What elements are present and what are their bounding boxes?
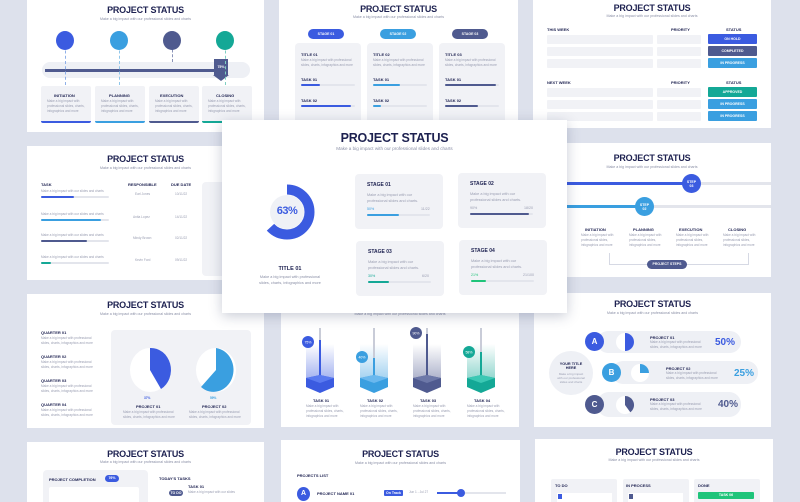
- phase cards: infographics and more: [47, 109, 79, 113]
- step labels: professional slides,: [581, 238, 608, 242]
- stage columns: TASK 01: [301, 77, 317, 82]
- title: PROJECT STATUS: [107, 300, 184, 310]
- step labels: [581, 227, 756, 269]
- step labels: infographics and more: [723, 243, 755, 247]
- step labels: CLOSING: [728, 227, 746, 232]
- table: next week: IN PROGRESS: [720, 114, 745, 118]
- task labels: infographics and more: [306, 414, 338, 418]
- project rows: 50%: [715, 337, 735, 348]
- stage columns: slides, charts, infographics and more: [301, 63, 353, 67]
- quarter list: Make a big impact with professional: [41, 384, 92, 388]
- thermometer bars: 40%: [358, 356, 366, 360]
- step labels: Make a big impact with: [581, 233, 613, 237]
- center title circle: Make a big impact: [559, 372, 583, 376]
- phase cards: professional slides, charts,: [208, 104, 246, 108]
- stage columns: TASK 02: [445, 98, 461, 103]
- table: this week: [547, 27, 757, 68]
- featured slide: project status overview: [222, 120, 567, 313]
- marker 75%: 75%: [217, 65, 224, 69]
- title: PROJECT STATUS: [341, 131, 448, 145]
- marker 75%: [214, 59, 228, 75]
- step tracks: [567, 174, 771, 216]
- phase cards: infographics and more: [155, 109, 187, 113]
- pie panel: [111, 330, 251, 425]
- donut chart 63%: [266, 184, 314, 240]
- subtitle: Make a big impact with our professional slides and charts: [606, 14, 698, 18]
- title 01 text block: [259, 266, 321, 285]
- center title circle: HERE: [566, 366, 576, 370]
- card: stage 01: STAGE 01: [367, 182, 391, 188]
- quarter list: QUARTER 03: [41, 378, 66, 383]
- task labels: TASK 01: [313, 398, 329, 403]
- phase cards: INITIATION: [54, 93, 75, 98]
- project rows: C: [592, 400, 597, 409]
- project rows: slides, charts, infographics and more: [650, 407, 702, 411]
- project list row: PROJECT NAME 01: [317, 491, 354, 496]
- project rows: PROJECT 02: [666, 366, 690, 371]
- project rows: slides, charts, infographics and more: [666, 376, 718, 380]
- stage columns: TITLE 01: [301, 52, 318, 57]
- slide: thermometer tasks: [281, 294, 519, 427]
- card: stage 03: STAGE 03: [368, 249, 392, 255]
- center title circle: with our professional: [557, 376, 585, 380]
- card: stage 03: professional slides and charts.: [368, 266, 419, 270]
- quarter list: Make a big impact with professional: [41, 360, 92, 364]
- task list: Kevin Ford: [135, 258, 150, 262]
- today's tasks: TODAY'S TASKS: [159, 476, 191, 481]
- title 01 text block: TITLE 01: [279, 266, 301, 272]
- project list row: A: [301, 490, 306, 497]
- slide: steps: [533, 143, 771, 277]
- stage columns: Make a big impact with professional: [301, 58, 352, 62]
- kanban columns: IN PROCESS: [626, 483, 651, 488]
- card: stage 04: Make a big impact with our: [471, 259, 516, 263]
- card: stage 04: STAGE 04: [471, 248, 495, 254]
- card: stage 02: [458, 173, 546, 228]
- pie panel: PROJECT 02: [202, 404, 226, 409]
- task list: 02/11/22: [175, 236, 187, 240]
- center title circle: [549, 351, 593, 395]
- phase cards: Make a big impact with: [47, 99, 79, 103]
- slide: stages columns: [279, 0, 518, 132]
- step labels: professional slides,: [629, 238, 656, 242]
- phase cards: infographics and more: [101, 109, 133, 113]
- today's tasks: TO DO: [170, 491, 182, 495]
- card: stage 03: 6/20: [422, 274, 429, 278]
- card: stage 01: [355, 174, 443, 229]
- title: PROJECT STATUS: [362, 449, 439, 459]
- task labels: Make a big impact with: [306, 404, 338, 408]
- task labels: professional slides, charts,: [467, 409, 505, 413]
- step labels: EXECUTION: [679, 227, 702, 232]
- step labels: infographics and more: [629, 243, 661, 247]
- task labels: professional slides, charts,: [360, 409, 398, 413]
- project list row: Jun 1 - Jul 27: [409, 490, 428, 494]
- stage columns: Make a big impact with professional: [445, 58, 496, 62]
- center title circle: YOUR TITLE: [560, 362, 582, 366]
- phase cards: Make a big impact with: [208, 99, 240, 103]
- card: stage 04: [459, 240, 547, 295]
- step tracks: 02: [643, 207, 646, 211]
- task labels: TASK 04: [474, 398, 490, 403]
- stage columns: TITLE 03: [445, 52, 462, 57]
- today's tasks: Make a big impact with our slides: [188, 490, 235, 494]
- project rows: PROJECT 03: [650, 397, 674, 402]
- title 01 text block: Make a big impact with professional: [260, 275, 320, 279]
- card: stage 02: professional slides and charts.: [470, 198, 521, 202]
- step labels: infographics and more: [581, 243, 613, 247]
- step labels: Make a big impact with: [723, 233, 755, 237]
- project rows: Make a big impact with professional: [666, 371, 716, 375]
- step labels: professional slides,: [676, 238, 703, 242]
- task labels: TASK 02: [367, 398, 383, 403]
- card: stage 02: 18/20: [524, 206, 533, 210]
- step labels: professional slides,: [723, 238, 750, 242]
- phase cards: CLOSING: [216, 93, 234, 98]
- stage columns: Make a big impact with professional: [373, 58, 424, 62]
- title: PROJECT STATUS: [614, 3, 690, 13]
- stage columns: [295, 43, 505, 120]
- step labels: Make a big impact with: [676, 233, 708, 237]
- center title circle: slides and charts: [560, 380, 582, 384]
- completion panel: 76%: [108, 476, 116, 480]
- table: this week: COMPLETED: [722, 49, 743, 53]
- quarter list: Make a big impact with professional: [41, 408, 92, 412]
- thermometer bars: 90%: [412, 332, 420, 336]
- pie panel: PROJECT 01: [136, 404, 160, 409]
- kanban columns: DONE: [698, 483, 710, 488]
- stage pills: STAGE 03: [462, 32, 478, 36]
- task labels: [306, 398, 505, 418]
- table: next week: PRIORITY: [671, 80, 690, 85]
- card: stage 03: 30%: [368, 274, 375, 278]
- title: PROJECT STATUS: [614, 153, 690, 163]
- table: this week: THIS WEEK: [547, 27, 569, 32]
- step labels: INITIATION: [585, 227, 606, 232]
- card: stage 04: 21%: [471, 273, 478, 277]
- slide: kanban: [535, 439, 773, 502]
- phase cards: EXECUTION: [160, 93, 183, 98]
- card: stage 03: [356, 241, 444, 296]
- timeline band: [42, 62, 250, 78]
- card: stage 01: 50%: [367, 207, 374, 211]
- table: next week: NEXT WEEK: [547, 80, 571, 85]
- card: stage 01: 11/22: [421, 207, 430, 211]
- quarter list: QUARTER 04: [41, 402, 66, 407]
- kanban columns: TASK 06: [719, 493, 733, 497]
- quarter list: QUARTER 01: [41, 330, 66, 335]
- table: this week: PRIORITY: [671, 27, 690, 32]
- thermometer bars: 58%: [465, 350, 473, 354]
- task list: Make a big impact with our slides and charts: [41, 255, 104, 259]
- subtitle: Make a big impact with our professional slides and charts: [607, 311, 698, 315]
- project rows: Make a big impact with professional: [650, 402, 700, 406]
- task list: Earl Jones: [135, 192, 150, 196]
- step tracks: 03: [690, 184, 693, 188]
- task labels: infographics and more: [360, 414, 392, 418]
- quarter list: slides, charts, infographics and more: [41, 413, 93, 417]
- table: next week: APPROVED: [723, 90, 742, 94]
- project list row: [297, 473, 506, 501]
- subtitle: Make a big impact with our professional slides and charts: [606, 165, 698, 169]
- task list: RESPONSIBLE: [128, 182, 157, 187]
- card: stage 02: Make a big impact with our: [470, 192, 515, 196]
- task labels: TASK 03: [420, 398, 436, 403]
- task list: Make a big impact with our slides and charts: [41, 212, 104, 216]
- step labels: PLANNING: [633, 227, 654, 232]
- subtitle: Make a big impact with our professional slides and charts: [608, 458, 700, 462]
- task list: Make a big impact with our slides and charts: [41, 233, 104, 237]
- task list: 14/11/22: [175, 215, 187, 219]
- title: PROJECT STATUS: [616, 447, 692, 457]
- progress line: [45, 69, 215, 72]
- table: next week: STATUS: [726, 80, 741, 85]
- stage pills: [308, 29, 488, 39]
- title: PROJECT STATUS: [107, 5, 184, 15]
- pie panel: slides, charts, infographics and more: [123, 415, 175, 419]
- task labels: infographics and more: [467, 414, 499, 418]
- step labels: Make a big impact with: [629, 233, 661, 237]
- project rows: 40%: [718, 399, 738, 410]
- card: stage 04: professional slides and charts.: [471, 265, 522, 269]
- stage columns: TASK 02: [301, 98, 317, 103]
- today's tasks: TASK 01: [188, 484, 204, 489]
- quarter list: Make a big impact with professional: [41, 336, 92, 340]
- title: PROJECT STATUS: [107, 449, 184, 459]
- task list: Mindy Brown: [133, 236, 151, 240]
- card: stage 01: professional slides and charts.: [367, 199, 418, 203]
- phase cards: professional slides, charts,: [101, 104, 139, 108]
- title 01 text block: slides, charts, infographics and more: [259, 281, 321, 285]
- task labels: professional slides, charts,: [306, 409, 344, 413]
- project rows: 25%: [734, 368, 754, 379]
- title: PROJECT STATUS: [360, 4, 437, 14]
- task list: DUE DATE: [171, 182, 191, 187]
- quarter list: [41, 330, 93, 417]
- title: PROJECT STATUS: [107, 154, 184, 164]
- step labels: PROJECT STEPS: [652, 262, 681, 266]
- stage pills: STAGE 02: [390, 32, 406, 36]
- quarter list: QUARTER 02: [41, 354, 66, 359]
- stage columns: TASK 01: [373, 77, 389, 82]
- phase cards: [41, 86, 252, 123]
- card: stage 02: 90%: [470, 206, 477, 210]
- completion panel: [43, 470, 148, 502]
- stage columns: slides, charts, infographics and more: [445, 63, 497, 67]
- phase cards: infographics and more: [208, 109, 240, 113]
- phase cards: professional slides, charts,: [47, 104, 85, 108]
- phase cards: PLANNING: [109, 93, 130, 98]
- subtitle: Make a big impact with our professional slides and charts: [336, 146, 453, 151]
- subtitle: Make a big impact with our professional slides and charts: [100, 17, 191, 21]
- completion panel: PROJECT COMPLETION: [49, 477, 96, 482]
- project rows: PROJECT 01: [650, 335, 674, 340]
- project list row: PROJECTS LIST: [297, 473, 328, 478]
- table: next week: [547, 80, 757, 121]
- pie panel: Make a big impact with professional: [189, 410, 240, 414]
- quarter list: slides, charts, infographics and more: [41, 341, 93, 345]
- today's tasks: [159, 476, 235, 496]
- task labels: Make a big impact with: [360, 404, 392, 408]
- project rows: [585, 331, 758, 417]
- donut chart 63%: 63%: [277, 205, 297, 217]
- project rows: slides, charts, infographics and more: [650, 345, 702, 349]
- phase cards: Make a big impact with: [155, 99, 187, 103]
- slide: projects A B C: [534, 293, 771, 427]
- slide: weekly status table: [533, 0, 771, 128]
- subtitle: Make a big impact with our professional slides and charts: [353, 15, 444, 19]
- step tracks: STEP: [687, 180, 696, 184]
- quarter list: slides, charts, infographics and more: [41, 365, 93, 369]
- task list: Anita Lopez: [133, 215, 150, 219]
- table: next week: IN PROGRESS: [720, 102, 745, 106]
- stage pills: STAGE 01: [318, 32, 334, 36]
- subtitle: Make a big impact with our professional slides and charts: [100, 460, 191, 464]
- step labels: infographics and more: [676, 243, 708, 247]
- team panel: [202, 182, 262, 276]
- task labels: professional slides, charts,: [413, 409, 451, 413]
- card: stage 04: 21/100: [523, 273, 534, 277]
- task list: 10/11/22: [175, 192, 187, 196]
- phase cards: Make a big impact with: [101, 99, 133, 103]
- subtitle: Make a big impact with our professional slides and charts: [355, 461, 446, 465]
- card: stage 03: Make a big impact with our: [368, 260, 413, 264]
- stage columns: TASK 02: [373, 98, 389, 103]
- pie panel: 37%: [144, 396, 150, 400]
- pie panel: Make a big impact with professional: [123, 410, 174, 414]
- pie panel: 59%: [210, 396, 216, 400]
- task list: 09/11/22: [175, 258, 187, 262]
- table: this week: IN PROGRESS: [720, 61, 745, 65]
- task list: Make a big impact with our slides and charts: [41, 189, 104, 193]
- subtitle: Make a big impact with our professional slides and charts: [100, 312, 191, 316]
- phase cards: professional slides, charts,: [155, 104, 193, 108]
- table: this week: STATUS: [726, 27, 741, 32]
- kanban columns: [551, 479, 760, 502]
- step tracks: STEP: [640, 203, 649, 207]
- task labels: Make a big impact with: [413, 404, 445, 408]
- stage columns: slides, charts, infographics and more: [373, 63, 425, 67]
- slide: task table: [27, 146, 264, 280]
- project rows: A: [592, 337, 597, 346]
- pie panel: slides, charts, infographics and more: [189, 415, 241, 419]
- card: stage 02: STAGE 02: [470, 181, 494, 187]
- slide: quarters pies: [27, 294, 264, 428]
- project list row: On Track: [386, 491, 401, 495]
- project rows: B: [609, 368, 614, 377]
- stage columns: TITLE 02: [373, 52, 390, 57]
- thermometer bars: [302, 327, 495, 393]
- task list: [41, 182, 191, 264]
- task list: TASK: [41, 182, 52, 187]
- stage columns: TASK 01: [445, 77, 461, 82]
- title: PROJECT STATUS: [614, 299, 691, 309]
- thermometer bars: 75%: [304, 340, 312, 344]
- subtitle: Make a big impact with our professional slides and charts: [354, 312, 446, 316]
- task labels: infographics and more: [413, 414, 445, 418]
- icons: phase circles: [56, 31, 234, 85]
- quarter list: slides, charts, infographics and more: [41, 389, 93, 393]
- kanban columns: TO DO: [555, 483, 568, 488]
- card: stage 01: Make a big impact with our: [367, 193, 412, 197]
- slide: projects list: [281, 440, 520, 502]
- table: this week: ON HOLD: [724, 37, 741, 41]
- task labels: Make a big impact with: [467, 404, 499, 408]
- slide: timeline phases: [27, 0, 264, 132]
- slide: project completion: [27, 442, 264, 502]
- subtitle: Make a big impact with our professional slides and charts: [100, 166, 191, 170]
- project rows: Make a big impact with professional: [650, 340, 700, 344]
